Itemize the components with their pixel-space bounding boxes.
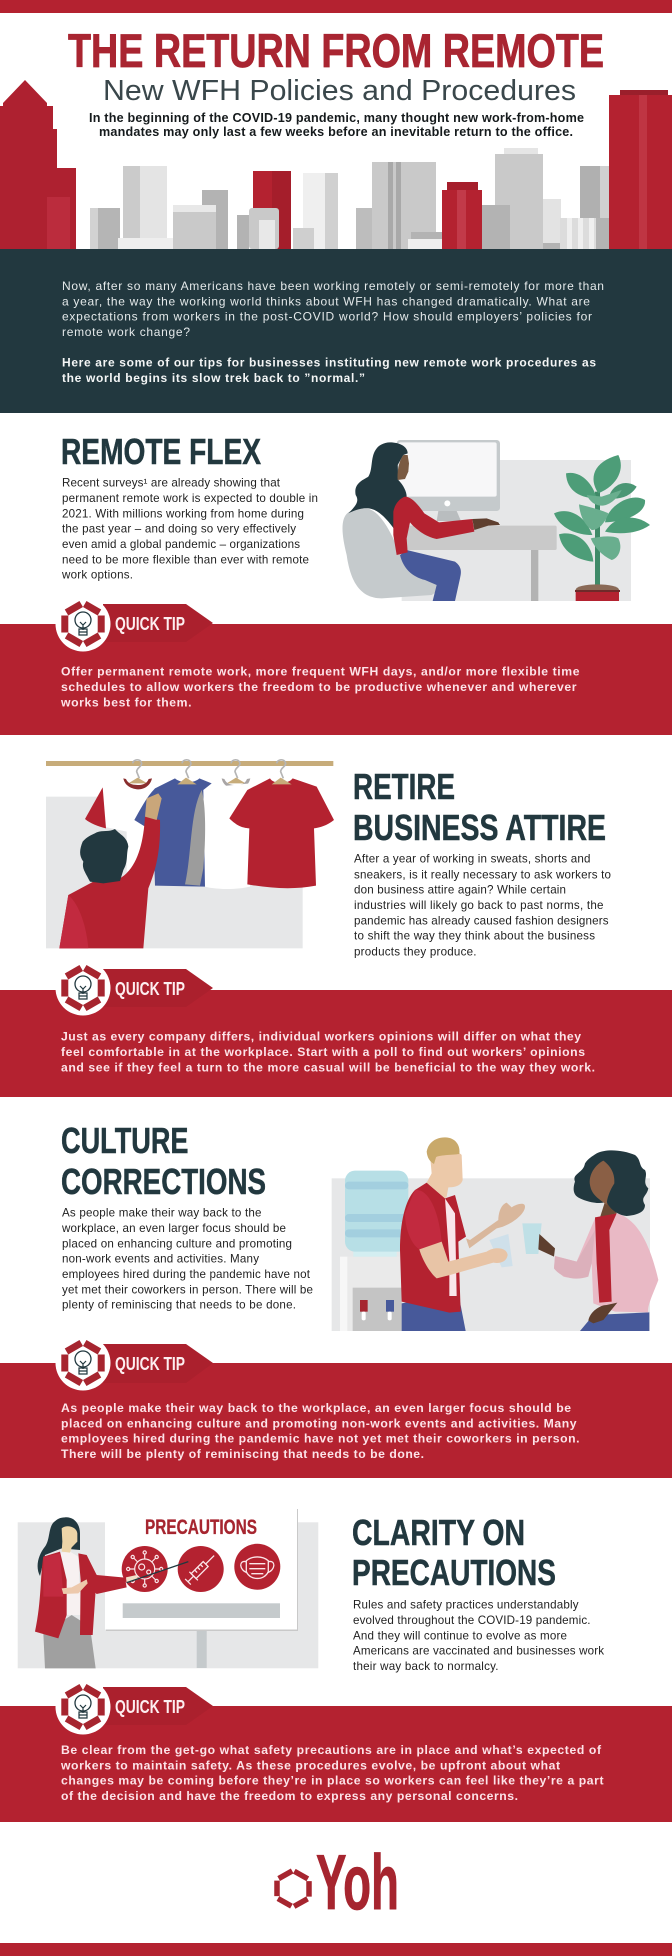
logo: Yoh (277, 1838, 399, 1926)
text: remote flex body: need to be more flexible than ever with remote (62, 553, 309, 566)
woman's top (595, 1213, 617, 1303)
text: culture body: placed on enhancing culture and promoting (62, 1237, 292, 1250)
quick tip text: Be clear from the get-go what safety precautions are in place and what’s expected of (61, 1743, 602, 1757)
person body shading (59, 895, 88, 948)
quick tip text: and see if they feel a turn to the more casual will be beneficial to the way they work. (61, 1060, 595, 1074)
illustration: woman at desk with plant (342, 440, 650, 601)
quick tip text (61, 1030, 595, 1074)
presenter jacket (35, 1552, 97, 1638)
quick tip text: works best for them. (60, 696, 192, 710)
text: culture body: workplace, an even larger focus should be (61, 1222, 286, 1235)
man's shirt (400, 1183, 466, 1313)
header illustration: city skyline (0, 80, 672, 249)
heading: retire business attire (353, 766, 606, 848)
woman's cardigan (554, 1213, 658, 1312)
subtitle: New WFH Policies and Procedures (103, 75, 576, 107)
quick tip text: workers to maintain safety. As these procedures evolve, be upfront about what (60, 1758, 560, 1772)
text: culture body: yet met their coworkers in person. There will be (62, 1283, 313, 1296)
person hand (145, 793, 162, 820)
text: retire body: products they produce. (354, 945, 476, 958)
icon: light bulb badge (56, 596, 110, 652)
intro tips statement (62, 356, 596, 385)
illustration: clothes rail and person (46, 760, 334, 948)
text: culture body: non-work events and activities. Many (62, 1253, 259, 1266)
quick tip banner: QUICK TIP (115, 614, 185, 634)
text: culture body: plenty of reminiscing that needs to be done. (62, 1299, 296, 1312)
cup held by man (489, 1234, 513, 1267)
text: remote flex body: 2021. With millions working from home during (62, 507, 304, 520)
logo mark (277, 1870, 309, 1907)
panel: quick tip 3 (0, 1336, 672, 1478)
intro paragraph: expectations from workers in the post-COVID world? How should employers’ policies for (62, 310, 592, 324)
text: remote flex body: even amid a global pandemic – organizations (62, 538, 300, 551)
text: clarity body: evolved throughout the COVID-19 pandemic. (353, 1614, 590, 1627)
presenter shirt (60, 1552, 81, 1615)
man's trousers (402, 1293, 466, 1331)
text: remote flex body: permanent remote work is expected to double in (62, 492, 318, 505)
woman's hand (472, 518, 500, 530)
text: clarity body (353, 1599, 604, 1673)
heading: retire business attire: BUSINESS ATTIRE (353, 807, 606, 848)
presenter figure (35, 1517, 188, 1668)
empty hanger two (222, 778, 250, 789)
text: clarity body: Rules and safety practices understandably (353, 1599, 579, 1612)
quick tip banner (103, 1687, 213, 1725)
quick tip text (60, 1743, 604, 1803)
desk (407, 523, 557, 601)
bottom bar (0, 1943, 672, 1956)
quick tip banner (103, 604, 213, 642)
text: retire body: don business attire again? While certain (354, 884, 566, 897)
presenter face (62, 1526, 77, 1553)
quick tip text: feel comfortable in at the workplace. Start with a poll to find out workers’ opinions (61, 1045, 585, 1059)
red hanging sleeve (85, 787, 106, 828)
icon: virus (122, 1546, 168, 1592)
board heading: PRECAUTIONS (145, 1516, 257, 1539)
intro tips statement: Here are some of our tips for businesses instituting new remote work procedures as (62, 356, 596, 370)
text: culture body: As people make their way back to the (62, 1207, 262, 1220)
chair (342, 508, 438, 598)
man's forearm (419, 1242, 508, 1278)
text: remote flex body (61, 477, 318, 582)
quick tip text: Just as every company differs, individual workers opinions will differ on what they (61, 1030, 581, 1044)
intro paragraph: Now, after so many Americans have been working remotely or semi-remotely for more than (62, 279, 604, 293)
heading: clarity on precautions: PRECAUTIONS (352, 1552, 556, 1593)
pointer stick (127, 1562, 188, 1583)
woman's hair (348, 442, 408, 535)
illustration: presenter with precautions board (18, 1508, 318, 1668)
quick tip banner (103, 969, 213, 1007)
man's sleeve (405, 1190, 442, 1249)
blue shirt (134, 778, 212, 887)
intro text (89, 111, 584, 139)
empty hanger (123, 778, 152, 789)
blue shirt hanger (177, 778, 197, 784)
text: retire body: After a year of working in sweats, shorts and (354, 853, 590, 866)
icon: syringe (178, 1546, 224, 1592)
white shirt (200, 783, 250, 889)
quick tip text: Offer permanent remote work, more frequent WFH days, and/or more flexible time (61, 665, 580, 679)
cup held by woman (522, 1223, 542, 1254)
icon: face mask (234, 1544, 280, 1590)
red shirt (229, 778, 334, 888)
panel: dark intro (0, 249, 672, 413)
text: culture body: employees hired during the pandemic have not (62, 1268, 311, 1281)
panel: quick tip 4 (0, 1680, 672, 1822)
heading: remote flex: REMOTE FLEX (61, 431, 261, 472)
text: clarity body: their way back to normalcy. (353, 1660, 498, 1673)
person hair (80, 829, 128, 883)
intro tips statement: the world begins its slow trek back to ”normal.” (62, 371, 365, 385)
woman's face (590, 1161, 614, 1205)
illustration: colleagues at water cooler (332, 1137, 658, 1331)
water cooler (340, 1171, 408, 1331)
board post (197, 1629, 207, 1668)
quick tip text (61, 1401, 580, 1461)
man's undershirt (445, 1198, 457, 1296)
woman's trousers (580, 1312, 649, 1331)
red shirt hanger (272, 778, 292, 784)
presenter left hand (62, 1579, 88, 1594)
man's hair (427, 1137, 460, 1164)
heading: culture corrections: CORRECTIONS (61, 1161, 266, 1202)
quick tip text (60, 665, 580, 710)
presenter arm (83, 1555, 127, 1594)
board (105, 1508, 298, 1631)
text: remote flex body: Recent surveys¹ are already showing that (62, 477, 281, 490)
icon: light bulb badge (56, 1336, 110, 1390)
hanger hooks (133, 760, 286, 778)
quick tip banner (103, 1344, 213, 1383)
heading: retire business attire: RETIRE (353, 766, 455, 807)
quick tip text: of the decision and have the freedom to express any personal concerns. (61, 1789, 518, 1803)
presenter jacket shading (43, 1553, 63, 1597)
icon: light bulb badge (56, 960, 110, 1016)
quick tip banner: QUICK TIP (115, 1697, 185, 1717)
panel: quick tip 2 (0, 960, 672, 1097)
board bar (123, 1603, 280, 1618)
plant (554, 455, 650, 601)
intro text: In the beginning of the COVID-19 pandemic, many thought new work-from-home (89, 111, 584, 125)
top bar (0, 0, 672, 13)
white garment behind (103, 782, 150, 872)
hanger rail (46, 761, 333, 766)
text: remote flex body: the past year – and doing so very effectively (62, 523, 296, 536)
woman's hands (538, 1234, 617, 1323)
text: clarity body: And they will continue to evolve as more (353, 1629, 567, 1642)
logo wordmark: Yoh (316, 1838, 399, 1926)
intro paragraph (62, 279, 604, 339)
woman's hair (574, 1150, 648, 1216)
heading: culture corrections (61, 1120, 266, 1202)
quick tip text: employees hired during the pandemic have not yet met their coworkers in person. (61, 1432, 580, 1446)
man's neck and face (427, 1151, 463, 1198)
text: remote flex body: work options. (61, 569, 133, 582)
quick tip text: changes may be coming before they’re in place so workers can feel like they’re a part (61, 1774, 604, 1788)
text: retire body (354, 853, 611, 958)
text: retire body: sneakers, is it really necessary to ask workers to (354, 868, 611, 881)
intro text: mandates may only last a few weeks before an inevitable return to the office. (99, 125, 573, 139)
quick tip banner: QUICK TIP (115, 979, 185, 999)
presenter right hand (126, 1575, 138, 1583)
intro paragraph: a year, the way the working world thinks about WFH has changed dramatically. What are (62, 294, 590, 308)
quick tip text: schedules to allow workers the freedom to be productive whenever and wherever (61, 680, 577, 694)
woman's face (398, 455, 409, 480)
woman's neck (600, 1202, 617, 1217)
woman's trousers (400, 550, 461, 601)
person torso and raised arm (59, 817, 160, 948)
text: retire body: to shift the way they think about the business (354, 930, 595, 943)
quick tip text: placed on enhancing culture and promoting non-work events and activities. Many (61, 1416, 577, 1430)
quick tip text: There will be plenty of reminiscing that needs to be done. (61, 1447, 424, 1461)
text: clarity body: Americans are vaccinated and businesses work (353, 1645, 604, 1658)
text: retire body: pandemic has already caused fashion designers (354, 914, 609, 927)
woman's arm (554, 1230, 595, 1279)
quick tip banner: QUICK TIP (115, 1354, 185, 1374)
monitor (397, 440, 500, 521)
intro paragraph: remote work change? (62, 325, 190, 339)
gray stripe (185, 790, 205, 886)
heading: clarity on precautions (352, 1512, 556, 1593)
presenter hair (38, 1517, 80, 1576)
man's raised arm (466, 1203, 525, 1248)
woman's torso and arm (393, 497, 474, 555)
text: culture body (61, 1207, 313, 1312)
panel: quick tip 1 (0, 596, 672, 735)
heading: clarity on precautions: CLARITY ON (352, 1512, 525, 1553)
presenter skirt (43, 1615, 96, 1668)
icon: light bulb badge (56, 1680, 110, 1734)
heading: culture corrections: CULTURE (61, 1120, 188, 1161)
text: retire body: industries will likely go back to past norms, the (354, 899, 604, 912)
quick tip text: As people make their way back to the workplace, an even larger focus should be (61, 1401, 571, 1415)
